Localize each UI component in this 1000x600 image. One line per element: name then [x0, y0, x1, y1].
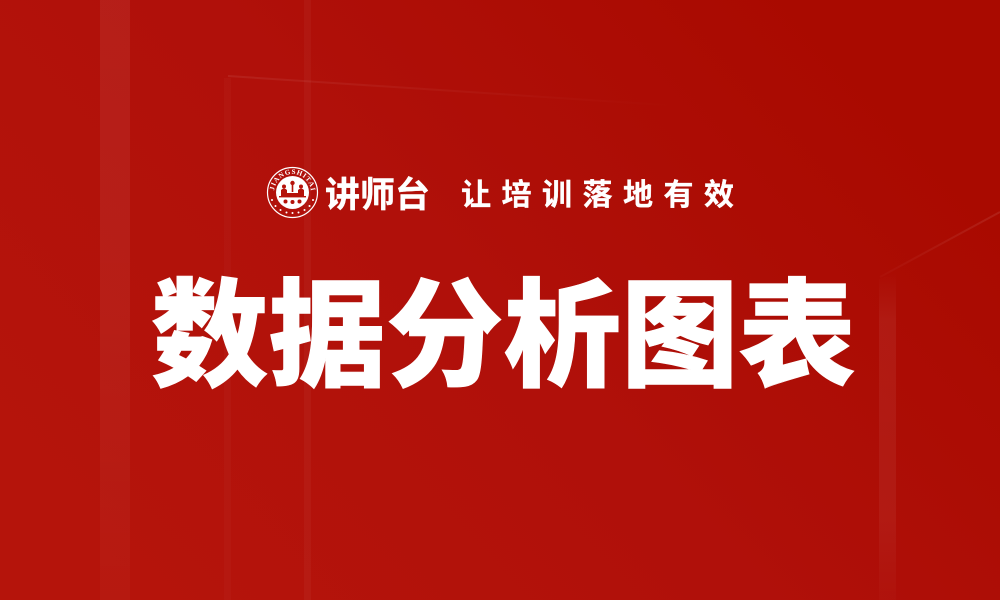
logo: Jiangshitai round seal: JIANGSHITAI [270, 169, 316, 191]
title: 数据分析图表 [151, 271, 856, 402]
brand name: 讲师台 [325, 176, 430, 215]
slogan: 让培训落地有效 [461, 179, 744, 212]
